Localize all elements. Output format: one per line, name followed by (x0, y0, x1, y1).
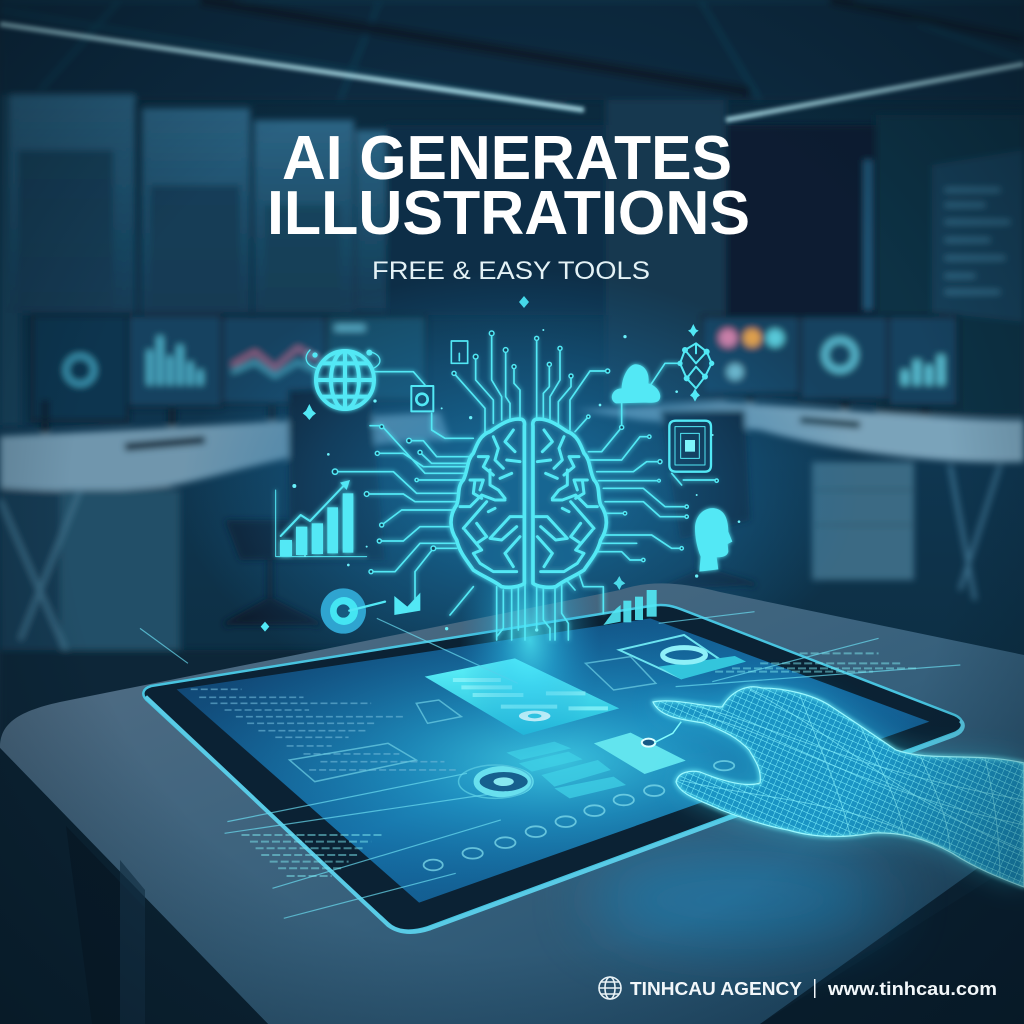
central blue haze (180, 270, 860, 710)
wall screen (932, 150, 1024, 322)
footer brand (599, 977, 997, 999)
card with connector (594, 722, 686, 774)
tablet side edge (146, 697, 963, 932)
right hemisphere (533, 419, 606, 587)
floating data overlay lines (140, 612, 960, 918)
floor (0, 650, 380, 740)
icon: bar chart rising (276, 480, 367, 557)
left hemisphere (451, 419, 524, 587)
hologram beam (460, 520, 600, 760)
icon: footer globe (599, 977, 621, 999)
back wall and column (386, 100, 1024, 415)
tablet (140, 605, 963, 932)
screen glow (177, 618, 929, 903)
trace end nodes (332, 331, 718, 574)
icon: target (321, 588, 385, 634)
subtitle: FREE & EASY TOOLS (372, 257, 650, 285)
office chairs (225, 385, 755, 625)
icon: network diamond (677, 324, 714, 402)
footer brand: TINHCAU AGENCY (630, 979, 802, 999)
foreground table (0, 583, 1024, 1024)
title (267, 124, 750, 248)
flow diagram (289, 657, 656, 782)
diamond above brain (519, 296, 529, 308)
holographic circuit brain and icons (261, 324, 740, 640)
hand glow (653, 687, 1024, 887)
reflected glow on table (590, 850, 890, 950)
icon: globe (306, 350, 380, 409)
small panel upper right (619, 635, 746, 679)
text lines on screen (191, 689, 456, 770)
tablet body (143, 605, 962, 931)
tablet screen (177, 618, 929, 903)
right desk (576, 402, 1024, 600)
small diamond (261, 622, 269, 632)
left monitors (32, 315, 426, 440)
hand mesh (656, 688, 1024, 886)
circuit traces (335, 333, 717, 640)
scattered particles (292, 329, 740, 632)
icon: human head (695, 508, 732, 572)
left desk (0, 412, 450, 660)
windows (0, 95, 386, 425)
icon: envelope (394, 593, 420, 615)
screen target (459, 765, 532, 798)
right monitors (702, 316, 958, 430)
icon: small document (451, 341, 468, 363)
icon: sparkle left (303, 404, 316, 420)
title: AI GENERATES (282, 124, 732, 193)
ceiling light right (726, 64, 1024, 120)
icon: small bar chart near tablet (603, 576, 657, 625)
icon: cloud (612, 364, 660, 403)
wireframe hand (640, 670, 1024, 900)
title: ILLUSTRATIONS (267, 179, 750, 248)
glowing central panel (425, 658, 619, 735)
brain (451, 419, 606, 587)
app icon row (424, 761, 734, 870)
icon: microchip (669, 421, 711, 472)
icon: square ring (411, 386, 433, 411)
hand outline (653, 687, 1024, 887)
footer brand: www.tinhcau.com (827, 979, 997, 999)
ceiling light left (0, 24, 584, 110)
ceiling (0, 0, 1024, 110)
stacked bars (506, 742, 626, 798)
